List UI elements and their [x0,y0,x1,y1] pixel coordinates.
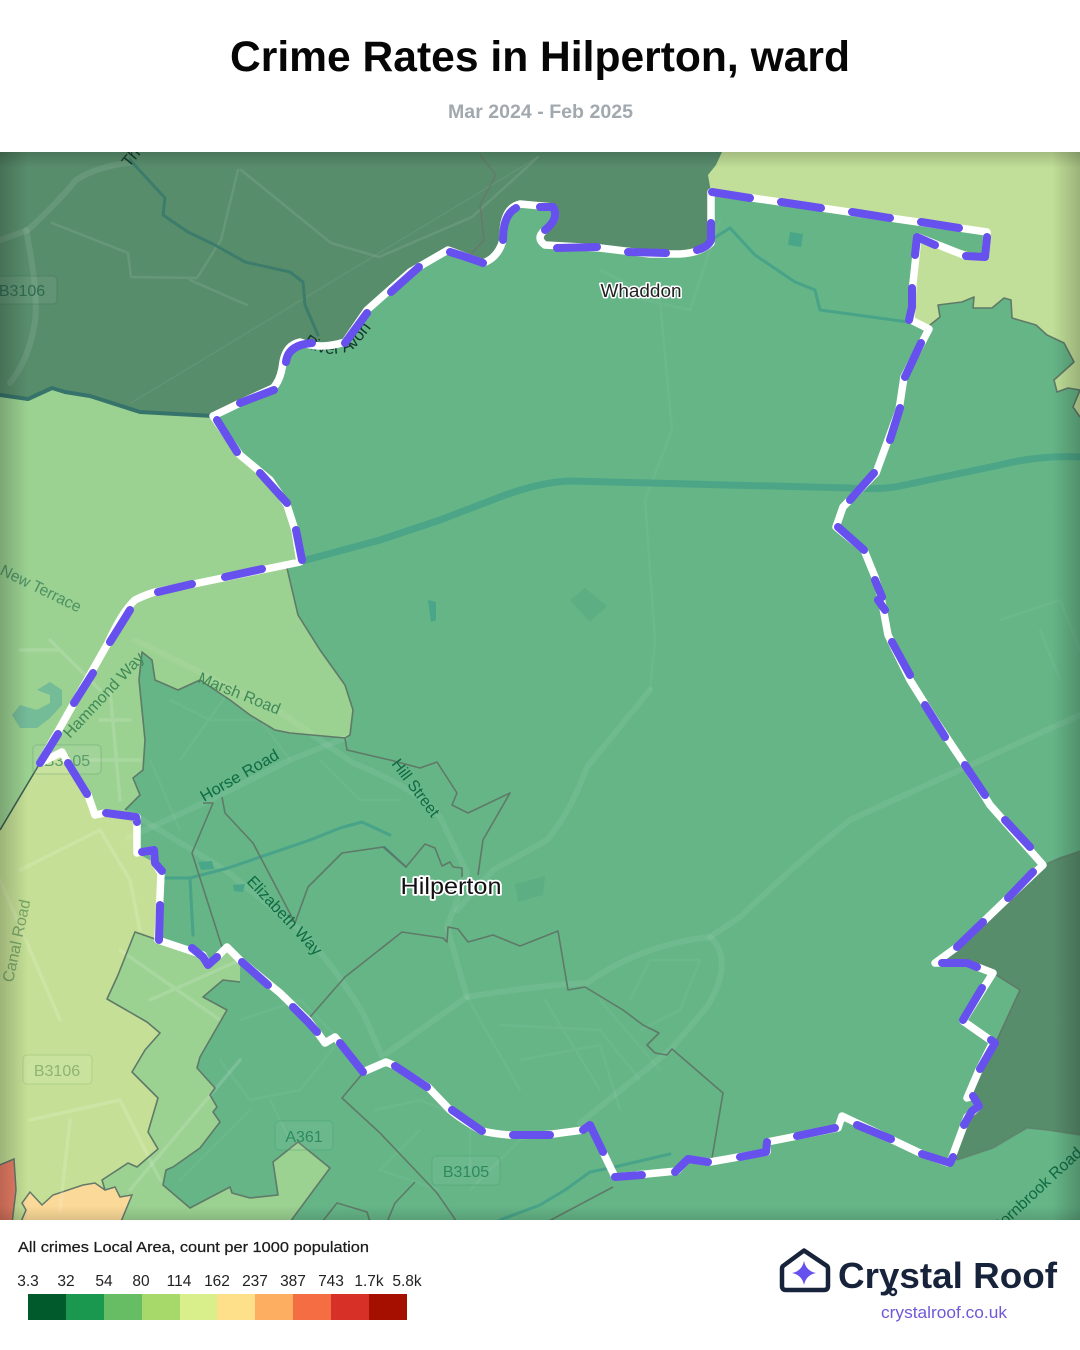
road network [0,157,1080,1210]
ward boundary: Hilperton [40,192,1043,1177]
region: south-west yellow-green area [0,752,161,1222]
brand logo [782,1250,1058,1322]
river and canal [0,160,1080,1220]
region: peach area [20,1183,132,1224]
map base: ward area fill [0,152,1080,1220]
ponds [198,232,803,892]
legend value labels: 387 [280,1273,306,1290]
legend title: All crimes Local Area, count per 1000 population [18,1239,369,1256]
legend value labels: 3.3 [17,1273,39,1290]
River Avon [0,388,213,416]
title: Crime Rates in Hilperton, ward [230,33,850,81]
label: Hill Street: Hill Street [388,756,443,821]
legend value labels: 32 [57,1273,75,1290]
badge: B3106 north [0,276,57,304]
southern stream [500,1154,670,1220]
boundary: white base line [40,192,1043,1177]
badge: B3105 south: B3105 [443,1164,489,1181]
badge: B3106 south [23,1055,92,1084]
legend value labels: 5.8k [392,1273,422,1290]
label: The (clipped, top): The [119,138,150,171]
legend value labels: 237 [242,1273,268,1290]
legend value labels: 162 [204,1273,230,1290]
boundary: purple dashes [40,192,1033,1177]
legend colour scale [28,1294,407,1320]
region: north-east higher-crime area [708,152,1080,417]
legend value labels: 80 [132,1273,150,1290]
stream in northern area [130,160,318,335]
label: River Avon: River Avon [306,324,371,354]
eastern stream [711,228,908,322]
central stream [162,822,390,935]
legend [17,1239,422,1320]
place label: Whaddon: Whaddon [600,281,682,301]
subtitle: date range: Mar 2024 - Feb 2025 [448,102,633,123]
legend value labels: 54 [95,1273,113,1290]
neighbourhood boundaries [0,155,1080,1222]
badge: B3106 south: B3106 [34,1063,80,1080]
region: east low-crime area [945,851,1080,1160]
region: north low-crime area [0,152,722,416]
badge: A361: A361 [285,1129,323,1146]
badge: B3105 south [432,1156,500,1185]
place label: Hilperton: Hilperton [400,873,502,899]
badge: A361 [275,1121,333,1150]
label: Marsh Road: Marsh Road [196,670,283,718]
legend value labels: 743 [318,1273,344,1290]
region: west light-green area [0,388,353,830]
label: Horse Road: Horse Road [198,747,282,805]
fields [515,588,607,902]
road number badges [0,276,500,1185]
legend value labels: 114 [167,1273,192,1290]
badge: B3106 north: B3106 [0,283,45,300]
legend value labels [17,1273,422,1290]
badge: B3105 west [33,745,101,774]
label: Elizabeth Way: Elizabeth Way [243,873,325,959]
label: Hammond Way: Hammond Way [60,650,148,742]
lake [12,682,62,728]
map edge vignette [0,152,1080,1220]
badge: B3105 west: B3105 [44,753,90,770]
brand name: Crystal Roof [838,1255,1058,1296]
Kennet and Avon canal [295,457,1080,563]
region: red area [0,1159,16,1224]
icon: house with star [782,1250,828,1290]
region: south light-green area [102,932,330,1222]
legend value labels: 1.7k [354,1273,384,1290]
website url: crystalroof.co.uk [881,1303,1008,1322]
label: Canal Road: Canal Road [0,898,34,984]
